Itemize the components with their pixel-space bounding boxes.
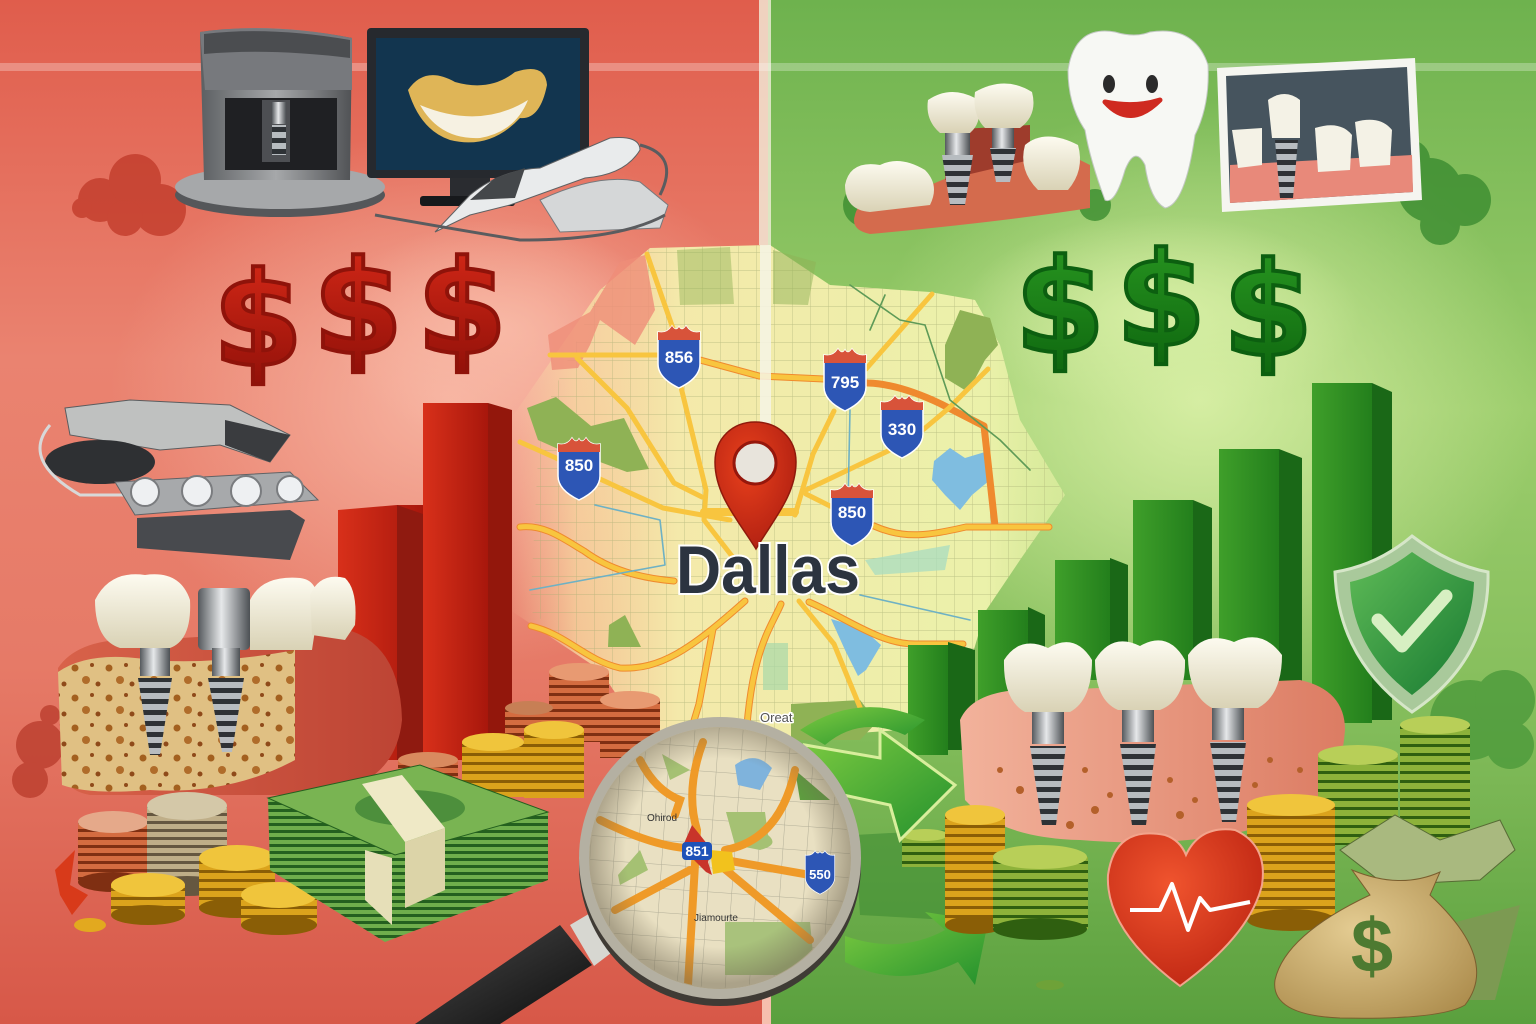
divider through map (760, 245, 771, 425)
lens badge: 550 (805, 851, 835, 894)
foliage green right (1430, 670, 1535, 769)
photo: dental x-ray (1217, 58, 1422, 212)
coin stack green (993, 845, 1088, 940)
map pin (715, 422, 796, 549)
green dollar signs (1015, 224, 1313, 386)
red bar chart (338, 403, 512, 760)
shield 795: 795 (831, 373, 859, 392)
icon: milling machine (175, 28, 385, 217)
red dollar signs: $ (213, 244, 303, 396)
small coin (74, 918, 106, 932)
magnifying glass with map detail (415, 717, 861, 1024)
shield 850 west (558, 438, 600, 500)
icon: monitor with dental arch (367, 28, 589, 206)
lens labels (647, 813, 738, 924)
arrow: green right (800, 707, 955, 840)
arrow: green lower curve (845, 912, 988, 985)
shield 850 west: 850 (565, 456, 593, 475)
lens badge: 851 (682, 825, 712, 875)
illustration: implant model top green (845, 84, 1090, 234)
illustration: healthy implants (960, 637, 1345, 842)
coin stack silver (147, 792, 227, 896)
red dollar signs: $ (417, 232, 507, 384)
coin stack gold low (111, 873, 185, 925)
map red districts (548, 255, 655, 370)
coin stack green back (1318, 745, 1398, 845)
coins and cash, green side (945, 716, 1520, 1018)
coin stack copper (600, 691, 660, 758)
lens badge: 851: 851 (685, 843, 709, 859)
coin stack gold right (1247, 794, 1335, 931)
coin stack red left (78, 811, 148, 892)
green dollar signs: $ (1015, 231, 1105, 383)
background: green side (768, 0, 1536, 1024)
map lakes (831, 448, 990, 676)
coin stack gold (524, 721, 584, 798)
coin stack gold (462, 733, 524, 797)
map parks (527, 247, 998, 740)
foliage green top (843, 140, 1491, 245)
icon: money bag (1275, 815, 1520, 1018)
coin stack gold front (241, 882, 317, 935)
lens labels: Jiamourte (694, 913, 738, 924)
green dollar signs: $ (1223, 234, 1313, 386)
red debris (55, 850, 88, 915)
coins and cash, red side (55, 663, 660, 942)
icon: money bag: $ (1351, 904, 1393, 989)
shield 850 east (831, 484, 873, 546)
shield 795 (824, 349, 866, 411)
green dollar signs: $ (1116, 224, 1206, 376)
shield 330: 330 (888, 420, 916, 439)
shield 856 (658, 326, 700, 388)
foliage red mid left (12, 705, 64, 798)
leaves (1036, 980, 1064, 990)
green bar chart (908, 383, 1392, 755)
lens labels: Ohirod (647, 813, 677, 824)
lens map content (585, 720, 855, 990)
cash bundle (268, 765, 548, 942)
label: Dallas: Dallas (676, 532, 860, 608)
red dollar signs (213, 232, 507, 396)
map of Dallas (510, 245, 1065, 754)
handle (415, 912, 615, 1024)
interstate shields on map (558, 326, 923, 546)
icon: security shield with check (1335, 536, 1488, 712)
backdrop behind lower arrows (855, 830, 950, 920)
lens rim shade (589, 727, 851, 989)
icon: heart with pulse (1108, 829, 1263, 986)
coin stack copper small (398, 752, 458, 792)
small green coin stack (902, 829, 948, 867)
coin stack copper tall (549, 663, 609, 742)
illustration: failing implant in bone (58, 574, 402, 795)
shield 856: 856 (665, 348, 693, 367)
map highways (520, 254, 1049, 754)
foliage red top (72, 154, 186, 236)
icon: handheld scanner and lights (40, 400, 318, 560)
shield 850 east: 850 (838, 503, 866, 522)
shield 330 (881, 396, 923, 458)
small label: map place: Oreat (760, 710, 793, 725)
coin stack gold (945, 805, 1005, 934)
background: red side (0, 0, 790, 1024)
coin stack gold mid (199, 845, 275, 918)
lens badge: 550: 550 (809, 867, 831, 882)
coin stack copper low (505, 701, 553, 748)
coin stack green tall right (1400, 716, 1470, 855)
icon: intraoral scanner (375, 138, 668, 240)
red dollar signs: $ (313, 232, 403, 384)
icon: smiling tooth (1068, 31, 1208, 208)
